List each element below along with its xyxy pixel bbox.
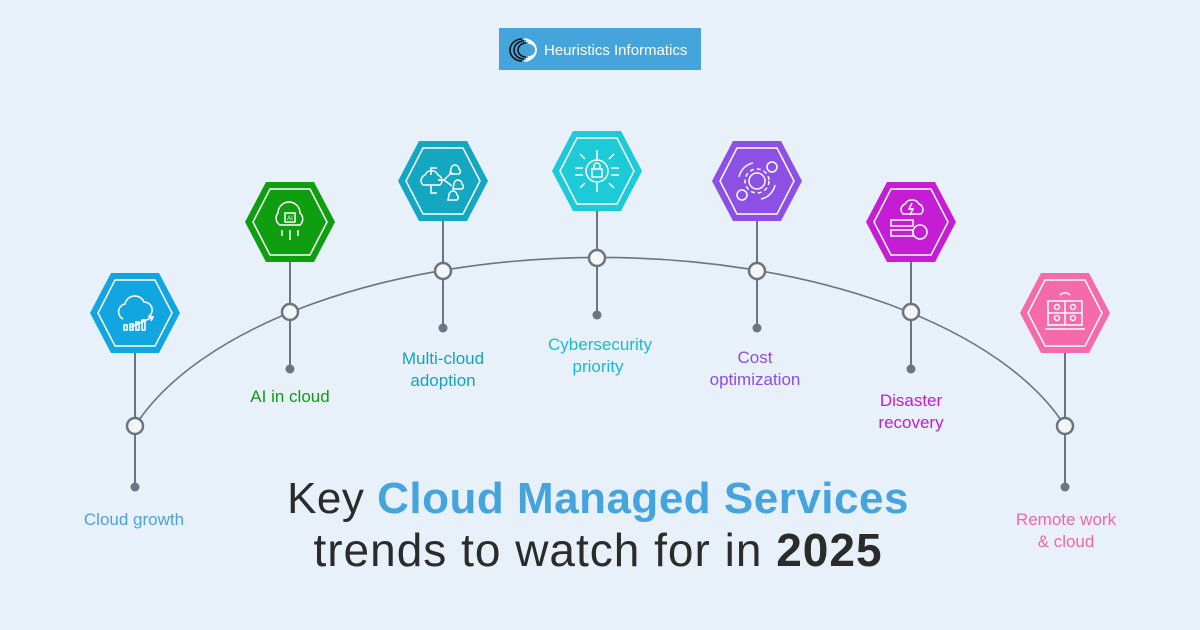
label: AI in cloud: AI in cloud (250, 387, 330, 406)
hexagon: disaster recovery (866, 182, 956, 262)
label: Cost optimization: Cost (738, 348, 773, 367)
stems (135, 211, 1065, 487)
label: Remote work: Remote work (1016, 510, 1117, 529)
nodes (127, 250, 1073, 434)
title (287, 474, 909, 576)
label: Cybersecurity: Cybersecurity (548, 335, 652, 354)
hexagon: multi-cloud (398, 141, 488, 221)
label: Cybersecurity: priority (572, 357, 624, 376)
hexagon: cost optimization (712, 141, 802, 221)
label: Cloud growth: Cloud growth (84, 510, 184, 529)
logo: Heuristics Informatics (544, 42, 687, 59)
hexagon: cloud growth (90, 273, 180, 353)
label: Cost optimization: optimization (710, 370, 800, 389)
label: Multi-cloud: Multi-cloud (402, 349, 484, 368)
hexagon: AI in cloud (245, 182, 335, 262)
label: Disaster recovery: recovery (878, 413, 944, 432)
hexagon: cybersecurity (552, 131, 642, 211)
title: trends to watch for in 2025 (313, 524, 883, 576)
hexagon: remote work (1020, 273, 1110, 353)
label: Remote work: & cloud (1038, 532, 1094, 551)
timeline arc (135, 257, 1065, 426)
label: Multi-cloud: adoption (410, 371, 476, 390)
end dots (130, 310, 1070, 492)
title: Key Cloud Managed Services (287, 474, 909, 523)
hexagon: AI in cloud: AI (287, 216, 293, 222)
logo (499, 28, 701, 70)
label: Disaster recovery: Disaster (880, 391, 943, 410)
